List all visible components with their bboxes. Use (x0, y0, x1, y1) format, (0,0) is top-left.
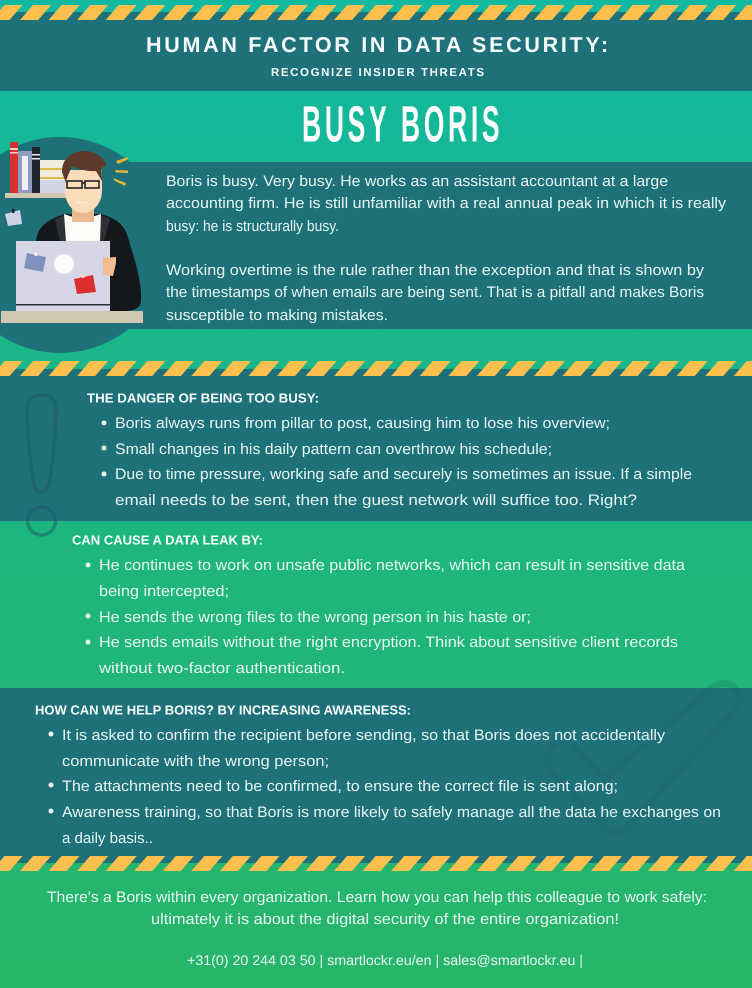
text: closing message (47, 889, 707, 928)
list: danger bullets: Boris always runs from pillar to post, causing him to lose his overview; (115, 415, 610, 432)
list: help bullets: Awareness training, so that Boris is more likely to safely manage all the data he exchanges on (62, 804, 721, 821)
list: data leak bullets: He continues to work on unsafe public networks, which can result in sensitive data (99, 557, 686, 574)
text: danger heading: THE DANGER OF BEING TOO BUSY: (87, 390, 319, 406)
text: intro paragraphs: susceptible to making mistakes. (166, 307, 388, 324)
list: data leak bullets: being intercepted; (99, 583, 229, 600)
text: contact details: +31(0) 20 244 03 50 | smartlockr.eu/en | sales@smartlockr.eu | (187, 952, 583, 968)
text: intro paragraphs: accounting firm. He is still unfamiliar with a real annual peak in which it is really (166, 195, 726, 212)
text: closing message: There's a Boris within every organization. Learn how you can help this colleague to work safely: (47, 889, 707, 906)
text: intro paragraphs: busy: he is structurally busy. (166, 218, 339, 235)
list: danger bullets (102, 415, 692, 509)
list: danger bullets: email needs to be sent, then the guest network will suffice too. Right? (115, 492, 637, 509)
text: intro paragraphs (166, 173, 726, 324)
header panel (0, 12, 752, 91)
list: danger bullets: Due to time pressure, working safe and securely is sometimes an issue. If a simple (115, 466, 692, 483)
list: data leak bullets: without two-factor authentication. (98, 660, 345, 677)
text: intro paragraphs: Working overtime is the rule rather than the exception and that is shown by (166, 262, 704, 279)
illustration: Boris at laptop (1, 142, 143, 323)
text: data leak heading: CAN CAUSE A DATA LEAK BY: (72, 532, 263, 548)
icon: check mark (547, 683, 740, 832)
top hazard stripe (0, 5, 752, 20)
list: data leak bullets: He sends the wrong files to the wrong person in his haste or; (99, 609, 531, 626)
list: danger bullets: Small changes in his daily pattern can overthrow his schedule; (115, 441, 552, 458)
text: intro paragraphs: Boris is busy. Very busy. He works as an assistant accountant at a large (166, 173, 668, 190)
list: help bullets: a daily basis.. (62, 830, 153, 847)
list: help bullets: It is asked to confirm the recipient before sending, so that Boris does not accidentally (62, 727, 665, 744)
panel: intro (0, 137, 752, 353)
panel: how can we help (0, 688, 752, 863)
list: help bullets: communicate with the wrong person; (62, 753, 329, 770)
subtitle: RECOGNIZE INSIDER THREATS (271, 67, 484, 79)
list: data leak bullets (86, 557, 686, 677)
list: data leak bullets: He sends emails without the right encryption. Think about sensitive client records (99, 634, 678, 651)
main title: HUMAN FACTOR IN DATA SECURITY: (146, 33, 608, 57)
middle hazard stripe (0, 361, 752, 376)
name heading: BUSY BORIS (302, 96, 500, 152)
list: help bullets: The attachments need to be confirmed, to ensure the correct file is sent along; (62, 778, 618, 795)
icon: exclamation mark (27, 395, 56, 535)
panel: danger of being too busy (0, 369, 752, 521)
bottom hazard stripe (0, 856, 752, 871)
list: help bullets (48, 727, 721, 847)
text: closing message: ultimately it is about the digital security of the entire organization! (151, 911, 619, 928)
text: help heading: HOW CAN WE HELP BORIS? BY INCREASING AWARENESS: (35, 702, 411, 718)
text: intro paragraphs: the timestamps of when emails are being sent. That is a pitfall and makes Boris (166, 284, 704, 301)
